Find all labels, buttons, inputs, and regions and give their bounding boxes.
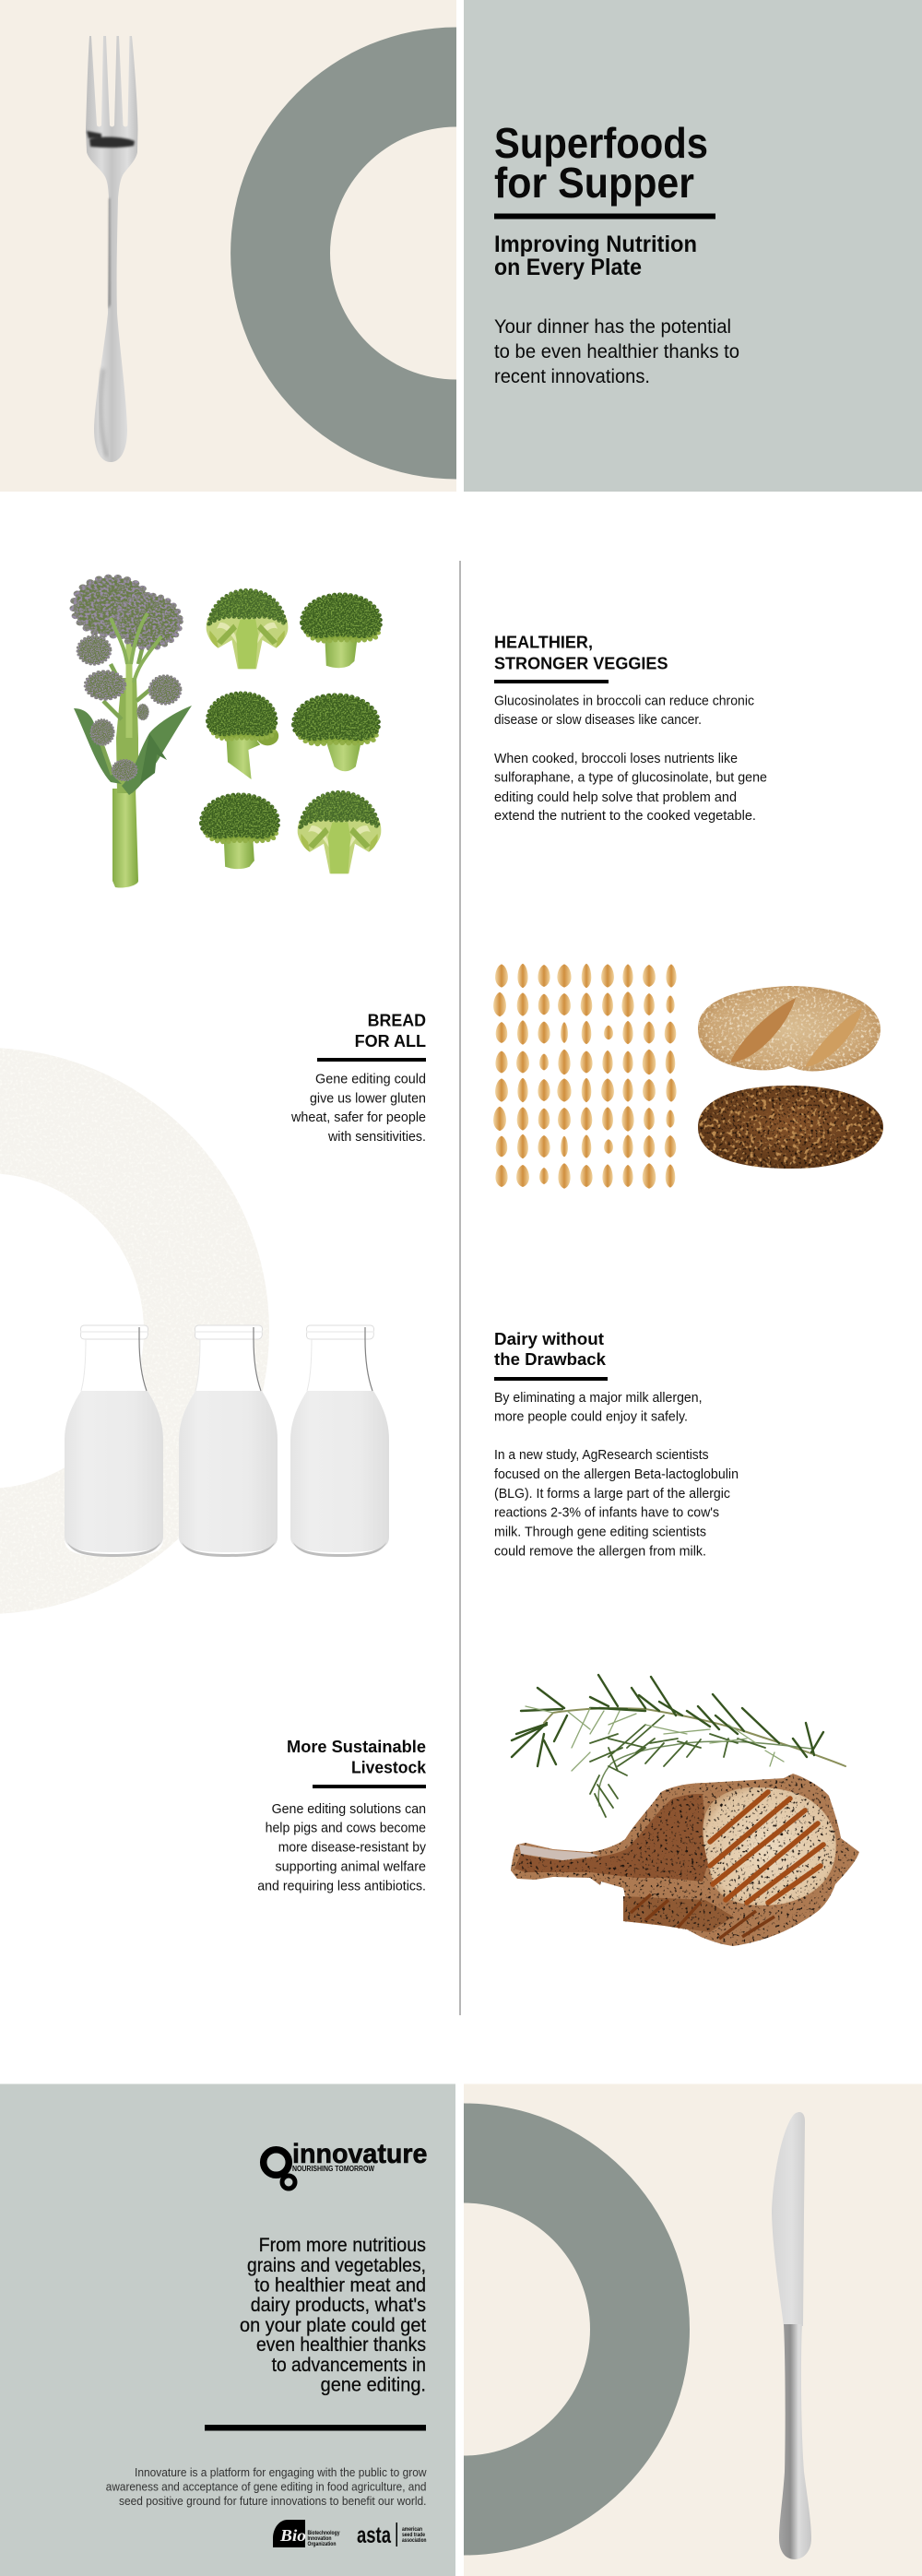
body [494, 694, 767, 824]
body: extend the nutrient to the cooked vegetable. [494, 809, 756, 824]
body: sulforaphane, a type of glucosinolate, but gene [494, 771, 767, 786]
subtitle: Improving Nutrition [494, 231, 697, 257]
image: rosemary sprig [512, 1675, 845, 1817]
logo: asta: association [402, 2537, 427, 2544]
closing statement [240, 2235, 426, 2396]
logo: innovature: innovature [292, 2139, 428, 2169]
body: more disease-resistant by [278, 1841, 427, 1856]
heading [355, 1011, 426, 1051]
heading: BREAD [368, 1011, 426, 1029]
body: and requiring less antibiotics. [257, 1879, 426, 1893]
closing statement: dairy products, what's [251, 2295, 426, 2316]
logo: asta: american [402, 2526, 422, 2533]
logo: Bio: Innovation [308, 2535, 332, 2542]
logo: asta: asta [357, 2523, 392, 2548]
heading [494, 1329, 607, 1369]
closing statement: on your plate could get [240, 2315, 426, 2336]
center divider line [459, 561, 461, 2015]
body: By eliminating a major milk allergen, [494, 1391, 703, 1406]
body: When cooked, broccoli loses nutrients like [494, 752, 738, 766]
icon: fork [86, 36, 138, 462]
body [494, 1391, 739, 1559]
body: give us lower gluten [310, 1092, 426, 1107]
text block: healthier veggies [494, 633, 767, 824]
panel: top sage title block [464, 0, 922, 492]
text block: bread for all [290, 1011, 426, 1145]
image: grilled pork chop [511, 1774, 859, 1946]
image: broccoli floret 1 [207, 590, 288, 669]
image: broccoli floret 2 [302, 595, 380, 668]
body: more people could enjoy it safely. [494, 1410, 688, 1425]
heading: the Drawback [494, 1349, 607, 1369]
body [257, 1802, 427, 1893]
about text: seed positive ground for future innovations to benefit our world. [119, 2495, 426, 2508]
rule [494, 680, 609, 683]
heading: FOR ALL [355, 1031, 426, 1051]
body: milk. Through gene editing scientists [494, 1525, 706, 1540]
intro text: recent innovations. [494, 366, 650, 387]
body: Glucosinolates in broccoli can reduce chronic [494, 694, 754, 708]
heading [494, 633, 668, 673]
body: with sensitivities. [327, 1130, 426, 1145]
logo: innovature: NOURISHING TOMORROW [292, 2165, 374, 2173]
body: supporting animal welfare [275, 1860, 426, 1875]
body: Gene editing could [315, 1072, 426, 1086]
closing statement: even healthier thanks [256, 2334, 426, 2356]
body: wheat, safer for people [290, 1110, 426, 1125]
image: golden bread loaf [698, 986, 881, 1071]
panel: top cream plate background [0, 0, 456, 492]
rule [313, 1785, 426, 1788]
body: disease or slow diseases like cancer. [494, 713, 702, 728]
heading [287, 1737, 427, 1777]
rule [494, 1377, 608, 1381]
body: help pigs and cows become [266, 1822, 426, 1836]
logo: asta: seed trade [402, 2532, 425, 2538]
logo: innovature [264, 2139, 428, 2189]
body [290, 1072, 426, 1145]
heading: Dairy without [494, 1329, 604, 1348]
body: editing could help solve that problem and [494, 790, 737, 805]
image: purple sprouting broccoli stalk [74, 577, 192, 888]
closing rule [205, 2425, 426, 2431]
panel: bottom sage closing block [0, 2084, 455, 2576]
title: for Supper [494, 159, 694, 207]
subtitle: on Every Plate [494, 255, 642, 280]
subtitle [494, 231, 697, 280]
logo: Bio: Organization [308, 2541, 337, 2547]
closing statement: gene editing. [321, 2375, 426, 2396]
logo: Bio: Bio [279, 2526, 306, 2545]
textured flour ring [0, 1048, 269, 1614]
logo: Bio: Biotechnology [308, 2530, 340, 2536]
intro text [494, 316, 739, 387]
image: milk bottle 3 [290, 1325, 389, 1557]
body: reactions 2-3% of infants have to cow's [494, 1506, 719, 1521]
title: Superfoods [494, 119, 708, 167]
body: (BLG). It forms a large part of the allergic [494, 1487, 730, 1502]
about text: Innovature is a platform for engaging with the public to grow [135, 2466, 427, 2479]
closing statement: to healthier meat and [254, 2274, 426, 2297]
icon: knife [772, 2112, 811, 2559]
plate ring top [230, 28, 456, 480]
image: seeded brown bread loaf [698, 1086, 883, 1169]
logo: asta [357, 2523, 427, 2548]
heading: More Sustainable [287, 1737, 426, 1756]
plate ring bottom [464, 2103, 690, 2555]
closing statement: From more nutritious [259, 2235, 426, 2256]
image: broccoli floret 5 [202, 795, 278, 869]
logo: Bio [273, 2520, 340, 2547]
text block: dairy without the drawback [494, 1329, 739, 1559]
body: could remove the allergen from milk. [494, 1544, 706, 1559]
image: broccoli floret 6 [298, 792, 381, 873]
heading: STRONGER VEGGIES [494, 653, 668, 673]
about text: awareness and acceptance of gene editing in food agriculture, and [106, 2481, 427, 2494]
body: In a new study, AgResearch scientists [494, 1448, 708, 1463]
image: wheat grain grid [493, 964, 677, 1189]
image: broccoli floret 4 [294, 695, 378, 771]
heading: Livestock [351, 1758, 427, 1777]
panel: bottom cream plate background [464, 2084, 922, 2576]
title rule [494, 214, 715, 220]
closing statement: to advancements in [272, 2355, 426, 2376]
body: focused on the allergen Beta-lactoglobulin [494, 1467, 739, 1482]
image: milk bottle 2 [179, 1325, 278, 1557]
body: Gene editing solutions can [272, 1802, 426, 1817]
text block: sustainable livestock [257, 1737, 427, 1893]
image: milk bottle 1 [65, 1325, 163, 1557]
heading: HEALTHIER, [494, 633, 593, 651]
image: broccoli floret 3 [207, 694, 278, 779]
title [494, 119, 708, 207]
about text [106, 2466, 427, 2508]
rule [317, 1058, 426, 1062]
closing statement: grains and vegetables, [247, 2255, 426, 2276]
intro text: to be even healthier thanks to [494, 341, 739, 362]
intro text: Your dinner has the potential [494, 316, 731, 338]
